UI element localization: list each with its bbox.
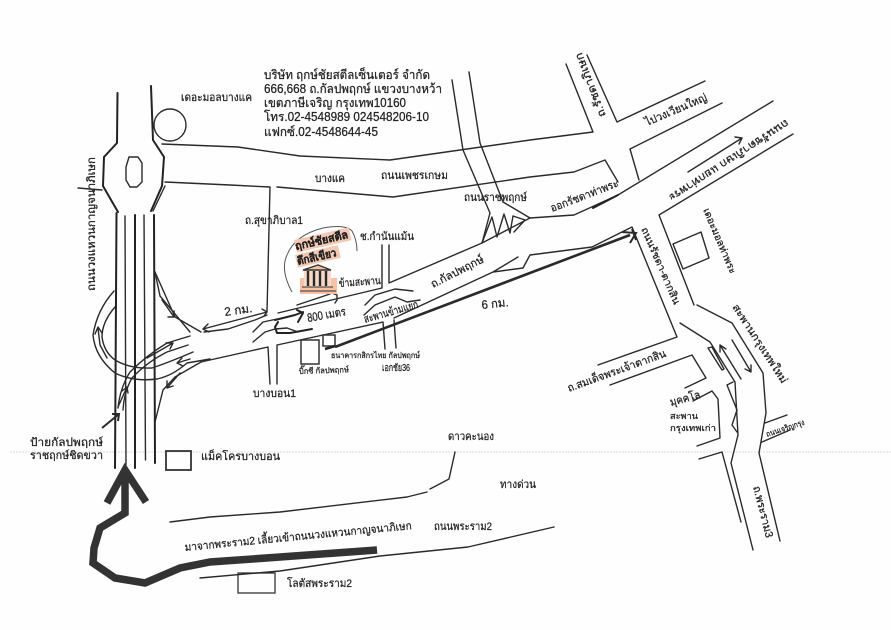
label: Somdet Phra Chao Taksin road: ถ.สมเด็จพระเจ้าตากสิน bbox=[565, 346, 668, 395]
label: cross the bridge: ข้ามสะพาน bbox=[338, 275, 381, 290]
label: sign instruction: ราชฤกษ์ชิดขวา bbox=[30, 449, 103, 462]
road: Krung Thep bridge and Rama 3 bbox=[610, 305, 790, 550]
label: Charoen Krung road: ถนนเจริญกรุง bbox=[765, 418, 806, 439]
icon: The Mall Bang Khae circle bbox=[154, 109, 186, 141]
label: Bang Bon 1: บางบอน1 bbox=[253, 388, 296, 400]
arrow: 6 km bbox=[335, 235, 630, 347]
label: diagonal road: ถนนรัชดาภิเษก แยกท่าพระ bbox=[666, 116, 791, 203]
label: company name: ฤกษ์ชัยสตีล bbox=[294, 228, 350, 253]
address block: บริษัท ฤกษ์ชัยสตีลเซ็นเตอร์ จำกัด bbox=[264, 67, 430, 82]
road: Kanlapaphruek lower edge bbox=[201, 227, 677, 384]
highlight: company name bbox=[294, 227, 351, 253]
ring road interchange bbox=[78, 86, 210, 468]
label: Phetkasem road: ถนนเพชรเกษม bbox=[381, 170, 448, 182]
label: Ratchada Taksin road: ถนนรัชดา-ตากสิน bbox=[638, 226, 681, 306]
address block: เขตภาษีเจริญ กรุงเทพ10160 bbox=[264, 96, 406, 111]
building: Lotus bbox=[238, 573, 275, 593]
arrow: 2 km bbox=[203, 309, 267, 332]
label: flyover: สะพานข้ามแยก bbox=[363, 299, 420, 326]
label: Dao Khanong: ดาวคะนอง bbox=[448, 431, 494, 443]
address block: โทร.02-4548989 024548206-10 bbox=[264, 109, 429, 124]
address block: 666,668 ถ.กัลปพฤกษ์ แขวงบางหว้า bbox=[264, 82, 442, 96]
road: Ratchada east bbox=[587, 55, 793, 305]
label: Kasikorn bank: ธนาคารกสิกรไทย กัลปพฤกษ์ bbox=[331, 350, 420, 360]
label: Sukhaphiban 1: ถ.สุขาภิบาล1 bbox=[245, 215, 303, 227]
destination marker bbox=[284, 227, 357, 294]
label: Ekkachai 36: เอกชัย36 bbox=[382, 363, 410, 374]
label: sign instruction bbox=[30, 436, 103, 462]
address block bbox=[264, 67, 442, 139]
label: Ratchaphruek road: ถนนราชพฤกษ์ bbox=[464, 191, 527, 204]
label: 800 metres: 800 เมตร bbox=[306, 304, 347, 325]
label: Rama 3 road: ถ.พระราม3 bbox=[750, 485, 775, 539]
label: Ratchadaphisek road: ถ.รัชดาภิเษก bbox=[573, 51, 609, 119]
icon: building bbox=[300, 265, 337, 294]
label: Lotus Rama 2: โลตัสพระราม2 bbox=[287, 576, 352, 590]
building: Kasikorn bank bbox=[323, 335, 335, 349]
label: old Krung Thep bridge: สะพาน bbox=[670, 411, 698, 421]
label: expressway: ทางด่วน bbox=[500, 479, 536, 491]
label: Soi Kamnan Maen: ช.กำนันแม้น bbox=[360, 231, 414, 243]
label: route instruction: มาจากพระราม2 เลี้ยวเข้าถนนวงแหวนกาญจนาภิเษก bbox=[184, 517, 412, 554]
label: 6 km: 6 กม. bbox=[481, 295, 509, 312]
label: old Krung Thep bridge: กรุงเทพเก่า bbox=[670, 423, 716, 434]
label: Bang Khae: บางแค bbox=[315, 173, 345, 185]
label: new Krung Thep bridge: สะพานกรุงเทพใหม่ bbox=[729, 302, 790, 386]
label: Makro Bang Bon: แม็คโครบางบอน bbox=[201, 449, 280, 463]
road: Rama 2 south edge bbox=[200, 527, 554, 578]
label: Ratchada Tha Phra exit: ออกรัชดาท่าพระ bbox=[549, 178, 620, 215]
arrow: sign pointer bbox=[102, 414, 119, 428]
arrow head: 6 km bbox=[622, 229, 636, 243]
road: Kanlapaphruek upper edge bbox=[278, 195, 618, 313]
building: Makro bbox=[166, 451, 191, 470]
highlight: green building bbox=[295, 245, 341, 268]
big route arrow bbox=[93, 470, 377, 583]
label: old Krung Thep bridge bbox=[670, 411, 716, 434]
icon: The Mall Tha Phra building bbox=[673, 232, 709, 269]
label: Kanchanaphisek ring road: ถนนวงแหวนกาญจนาภิเษก bbox=[86, 157, 98, 291]
label: Mukkhalo: มุคคโล bbox=[668, 387, 702, 409]
label: Big C: บิ๊กซี กัลปพฤกษ์ bbox=[299, 363, 349, 376]
label: The Mall Bang Khae: เดอะมอลบางแค bbox=[181, 92, 252, 104]
road: Rama 2 north edge bbox=[170, 452, 455, 522]
label: to Wongwian Yai: ไปวงเวียนใหญ่ bbox=[642, 91, 709, 129]
road: Phetkasem upper edge bbox=[162, 64, 593, 160]
label: Kanlapaphruek road: ถ.กัลปพฤกษ์ bbox=[428, 253, 486, 291]
road: Ratchaphruek bbox=[452, 72, 530, 243]
building: Big C bbox=[301, 340, 319, 364]
label: Rama 2 road: ถนนพระราม2 bbox=[434, 521, 492, 533]
road: Phetkasem lower edge bbox=[165, 160, 618, 312]
label: 2 km: 2 กม. bbox=[223, 301, 253, 319]
address block: แฟกซ์.02-4548644-45 bbox=[264, 125, 378, 139]
junction at Bang Bon 1 bbox=[253, 292, 337, 342]
label: sign instruction: ป้ายกัลปพฤกษ์ bbox=[30, 436, 103, 449]
label: green building: ตึกสีเขียว bbox=[296, 246, 338, 268]
label: The Mall Tha Phra: เดอะมอลท่าพระ bbox=[700, 207, 738, 276]
flyover lines bbox=[364, 289, 420, 315]
